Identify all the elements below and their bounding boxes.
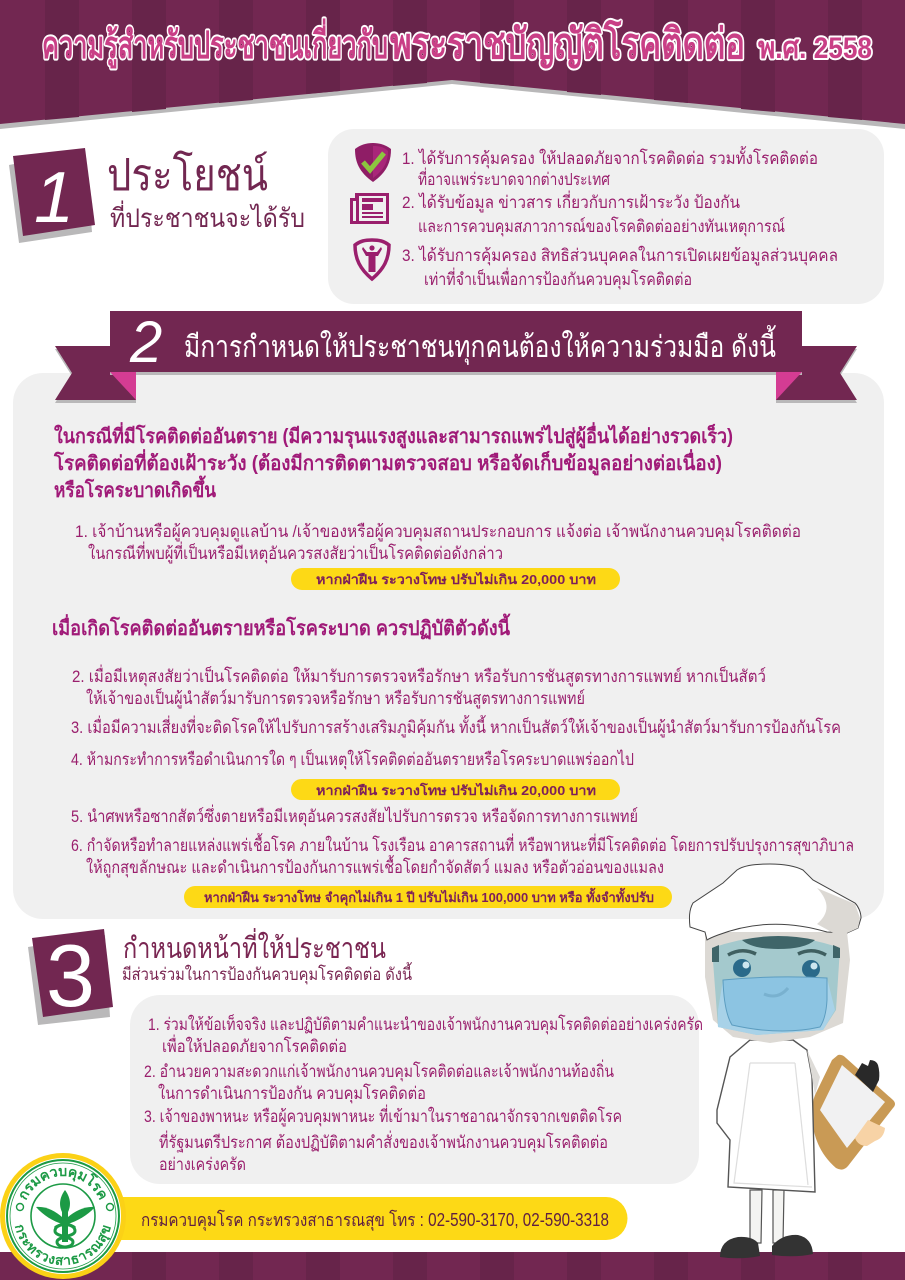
header band xyxy=(0,0,905,129)
title: พ.ศ. 2558 xyxy=(758,32,872,65)
hood and hat xyxy=(689,864,861,1043)
items 2 to 4 xyxy=(71,664,841,770)
contact bar: กรมควบคุมโรค กระทรวงสาธารณสุข โทร : 02-590-3170, 02-590-3318 xyxy=(141,1209,609,1231)
item 1 xyxy=(75,521,801,564)
section 1 number badge: 1 xyxy=(34,158,74,238)
section 3 heading: มีส่วนร่วมในการป้องกันควบคุมโรคติดต่อ ดังนี้ xyxy=(122,962,412,985)
section 1 number badge xyxy=(9,148,95,243)
items 2 to 4: ให้เจ้าของเป็นผู้นำสัตว์มารับการตรวจหรือรักษา หรือรับการชันสูตรทางการแพทย์ xyxy=(86,687,585,709)
benefit text: 2. ได้รับข้อมูล ข่าวสาร เกี่ยวกับการเฝ้าระวัง ป้องกัน xyxy=(402,190,740,213)
penalty pill 3: หากฝ่าฝืน ระวางโทษ จำคุกไม่เกิน 1 ปี ปรับไม่เกิน 100,000 บาท หรือ ทั้งจำทั้งปรับ xyxy=(204,887,654,906)
section 1 heading: ประโยชน์ xyxy=(107,150,268,200)
icon: shield check xyxy=(355,143,391,182)
panel: public duties: 1. ร่วมให้ข้อเท็จจริง และปฏิบัติตามคำแนะนำของเจ้าพนักงานควบคุมโรคติดต่ออย่างเคร่งครัด xyxy=(148,1013,703,1035)
section 1 heading xyxy=(107,150,305,233)
penalty pill 1 xyxy=(291,568,620,590)
panel: public duties: ที่รัฐมนตรีประกาศ ต้องปฏิบัติตามคำสั่งของเจ้าพนักงานควบคุมโรคติดต่อ xyxy=(159,1130,608,1153)
items 2 to 4: 2. เมื่อมีเหตุสงสัยว่าเป็นโรคติดต่อ ให้มารับการตรวจหรือรักษา หรือรับการชันสูตรทางการแพทย์ หากเป็นสัตว์ xyxy=(72,664,766,687)
title xyxy=(42,18,872,69)
penalty pill 2 xyxy=(291,779,620,800)
clipboard xyxy=(812,1055,895,1170)
emblem: winged caduceus xyxy=(16,1190,114,1247)
item 1: 1. เจ้าบ้านหรือผู้ควบคุมดูแลบ้าน /เจ้าของหรือผู้ควบคุมสถานประกอบการ แจ้งต่อ เจ้าพนักงานควบคุมโรคติดต่อ xyxy=(75,521,801,542)
penalty pill 2: หากฝ่าฝืน ระวางโทษ ปรับไม่เกิน 20,000 บาท xyxy=(316,782,596,798)
panel: public duties: อย่างเคร่งครัด xyxy=(159,1155,246,1174)
face mask xyxy=(718,977,835,1035)
panel: public duties: ในการดำเนินการป้องกัน ควบคุมโรคติดต่อ xyxy=(158,1083,426,1104)
benefit text: เท่าที่จำเป็นเพื่อการป้องกันควบคุมโรคติดต่อ xyxy=(424,267,692,290)
shoes xyxy=(720,1235,813,1258)
lead paragraph: โรคติดต่อที่ต้องเฝ้าระวัง (ต้องมีการติดตามตรวจสอบ หรือจัดเก็บข้อมูลอย่างต่อเนื่อง) xyxy=(53,448,722,477)
title: ความรู้สำหรับประชาชนเกี่ยวกับ xyxy=(42,18,388,69)
section 3 heading xyxy=(122,928,412,985)
icon: person shield xyxy=(355,240,389,279)
footer band xyxy=(0,1252,905,1280)
logo: department seal: กรมควบคุมโรค xyxy=(20,1168,106,1200)
section 3 number badge: 3 xyxy=(46,926,95,1025)
item 1: ในกรณีที่พบผู้ที่เป็นหรือมีเหตุอันควรสงสัยว่าเป็นโรคติดต่อดังกล่าว xyxy=(88,541,503,564)
lead paragraph: หรือโรคระบาดเกิดขึ้น xyxy=(54,475,216,502)
section 3 number badge xyxy=(28,926,113,1025)
title: พระราชบัญญัติโรคติดต่อ xyxy=(390,19,745,69)
section 2 ribbon banner xyxy=(55,310,857,403)
benefit text: ที่อาจแพร่ระบาดจากต่างประเทศ xyxy=(418,167,610,189)
items 5 and 6: 5. นำศพหรือซากสัตว์ซึ่งตายหรือมีเหตุอันควรสงสัยไปรับการตรวจ หรือจัดการทางการแพทย์ xyxy=(71,804,638,827)
contact bar xyxy=(100,1197,628,1240)
lead paragraph xyxy=(53,421,733,502)
items 5 and 6: ให้ถูกสุขลักษณะ และดำเนินการป้องกันการแพร่เชื้อโดยกำจัดสัตว์ แมลง หรือตัวอ่อนของแมลง xyxy=(86,855,664,878)
lead paragraph: ในกรณีที่มีโรคติดต่ออันตราย (มีความรุนแรงสูงและสามารถแพร่ไปสู่ผู้อื่นได้อย่างรวดเร็ว) xyxy=(54,421,733,450)
section 1 heading: ที่ประชาชนจะได้รับ xyxy=(110,200,305,233)
penalty pill 3 xyxy=(184,886,672,908)
panel: public duties xyxy=(130,995,703,1184)
items 2 to 4: 4. ห้ามกระทำการหรือดำเนินการใด ๆ เป็นเหตุให้โรคติดต่ออันตรายหรือโรคระบาดแพร่ออกไป xyxy=(71,748,634,770)
icon: newspaper xyxy=(350,193,389,224)
benefit text: และการควบคุมสภาวการณ์ของโรคติดต่ออย่างทันเหตุการณ์ xyxy=(418,216,785,237)
benefit text xyxy=(402,146,838,290)
face behind shield xyxy=(712,936,840,1035)
character: health officer with clipboard xyxy=(689,864,895,1258)
panel: public duties: 2. อำนวยความสะดวกแก่เจ้าพนักงานควบคุมโรคติดต่อและเจ้าพนักงานท้องถิ่น xyxy=(144,1059,614,1082)
legs xyxy=(750,1190,784,1243)
coat xyxy=(717,1040,815,1192)
logo: department seal: กระทรวงสาธารณสุข xyxy=(14,1224,111,1266)
section 2 ribbon banner: มีการกำหนดให้ประชาชนทุกคนต้องให้ความร่วมมือ ดังนี้ xyxy=(184,325,776,366)
benefit text: 1. ได้รับการคุ้มครอง ให้ปลอดภัยจากโรคติดต่อ รวมทั้งโรคติดต่อ xyxy=(402,146,818,169)
panel: public duties: เพื่อให้ปลอดภัยจากโรคติดต่อ xyxy=(162,1034,347,1056)
section 2 ribbon banner: 2 xyxy=(129,310,162,375)
penalty pill 1: หากฝ่าฝืน ระวางโทษ ปรับไม่เกิน 20,000 บาท xyxy=(316,571,596,587)
logo: department seal xyxy=(0,1153,123,1279)
items 5 and 6 xyxy=(71,804,854,878)
benefit text: 3. ได้รับการคุ้มครอง สิทธิส่วนบุคคลในการเปิดเผยข้อมูลส่วนบุคคล xyxy=(402,245,838,266)
section 3 heading: กำหนดหน้าที่ให้ประชาชน xyxy=(123,928,386,965)
subheading: เมื่อเกิดโรคติดต่ออันตรายหรือโรคระบาด ควรปฏิบัติตัวดังนี้ xyxy=(52,613,511,640)
panel: benefits xyxy=(328,129,884,304)
panel: duties xyxy=(13,373,884,919)
panel: public duties: 3. เจ้าของพาหนะ หรือผู้ควบคุมพาหนะ ที่เข้ามาในราชอาณาจักรจากเขตติดโรค xyxy=(144,1104,622,1127)
